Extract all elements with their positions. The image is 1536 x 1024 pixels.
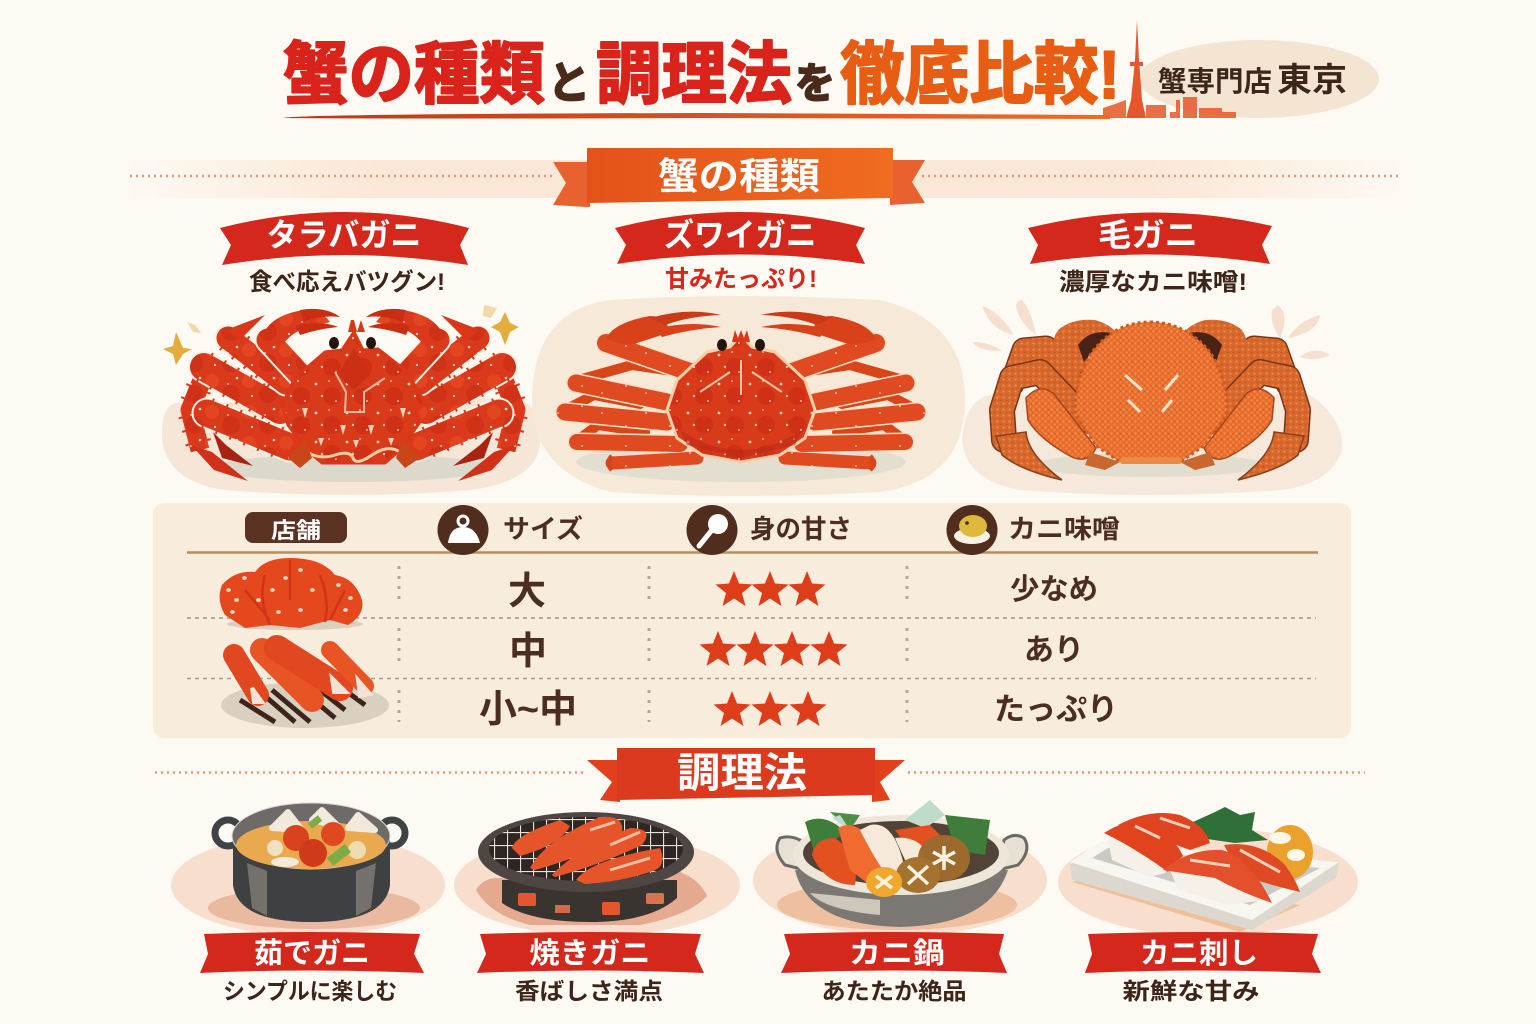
shop name badge: 蟹専門店 xyxy=(1158,66,1272,97)
row 2 values: あり xyxy=(1024,634,1084,667)
icon: miso dish xyxy=(946,505,998,555)
icon: size weight xyxy=(438,505,488,555)
row 3 values: たっぷり xyxy=(994,692,1118,727)
title text: 徹底比較! xyxy=(840,37,1120,113)
ribbon: ズワイガニ: ズワイガニ xyxy=(664,217,816,253)
ribbon: カニ刺し: カニ刺し xyxy=(1140,937,1258,970)
backdrop xyxy=(1058,828,1358,936)
thumbnail: whole crab xyxy=(220,558,363,630)
ribbon: タラバガニ xyxy=(220,212,469,265)
card: crab sashimi xyxy=(1058,807,1358,1004)
rules xyxy=(187,551,1318,554)
ribbon: 茹でガニ: 茹でガニ xyxy=(254,937,370,970)
backdrop xyxy=(171,834,445,936)
ribbon: カニ鍋 xyxy=(781,932,1007,973)
rating: 3 stars xyxy=(716,571,826,606)
title text: を xyxy=(795,60,835,107)
caption: 濃厚なカニ味噌! xyxy=(1059,269,1247,296)
backdrop xyxy=(454,834,740,936)
ribbon: タラバガニ: タラバガニ xyxy=(266,217,422,253)
caption: シンプルに楽しむ xyxy=(223,978,397,1004)
row 3 values xyxy=(479,689,1118,731)
header: store: 店舗 xyxy=(271,518,321,543)
ribbon: 毛ガニ: 毛ガニ xyxy=(1098,217,1198,253)
caption: 新鮮な甘み xyxy=(1122,978,1260,1004)
card: boiled crab xyxy=(171,803,445,1004)
icon: clay hot pot xyxy=(777,800,1027,927)
shop name badge xyxy=(1139,40,1379,118)
comparison table xyxy=(153,503,1351,738)
ribbon: 焼きガニ xyxy=(477,932,704,973)
section heading: cooking methods xyxy=(155,748,1365,802)
icon: sushi plate xyxy=(1070,807,1339,930)
header: crab miso: カニ味噌 xyxy=(1008,514,1120,544)
caption: 食べ応えバツグン! xyxy=(249,268,445,296)
backdrop xyxy=(162,398,540,495)
shadow xyxy=(213,454,493,482)
header: size xyxy=(438,505,583,555)
backdrop xyxy=(532,296,965,496)
header: sweetness xyxy=(686,505,852,555)
panel: snow crab xyxy=(532,212,965,496)
backdrop xyxy=(962,395,1342,495)
caption: 香ばしさ満点 xyxy=(515,978,663,1004)
crab illustration xyxy=(563,312,919,470)
row 1 values xyxy=(508,571,1098,613)
ribbon: カニ刺し xyxy=(1085,932,1321,973)
title underline xyxy=(283,113,1110,119)
shop name badge: 東京 xyxy=(1277,61,1347,98)
panel: king crab xyxy=(162,212,540,495)
row 2 values xyxy=(509,631,1084,673)
title text: 調理法 xyxy=(596,37,792,113)
icon: charcoal grill xyxy=(478,812,694,922)
row 1 values: 少なめ xyxy=(1010,573,1098,606)
shadow xyxy=(576,442,906,482)
icon: Tokyo tower and skyline xyxy=(1103,20,1236,118)
thumbnail: crab legs xyxy=(221,648,389,728)
section heading: crab types: 蟹の種類 xyxy=(658,156,820,197)
section heading: cooking methods: 調理法 xyxy=(677,750,807,796)
shadow xyxy=(1035,453,1265,477)
rating: 3 stars xyxy=(714,691,826,726)
header: size: サイズ xyxy=(503,514,583,544)
section heading: crab types xyxy=(120,148,1410,207)
row 1 values: 大 xyxy=(508,571,546,613)
ribbon: カニ鍋: カニ鍋 xyxy=(849,937,945,970)
rating: 4 stars xyxy=(700,631,848,666)
splash marks xyxy=(972,300,1330,359)
crab illustration xyxy=(996,320,1304,480)
table background xyxy=(153,503,1351,738)
card: crab hot pot xyxy=(753,800,1047,1004)
title text xyxy=(283,37,1120,113)
card: grilled crab xyxy=(454,812,740,1004)
icon: spoon xyxy=(686,505,738,555)
title text: 蟹の種類 xyxy=(283,37,545,113)
sparkles xyxy=(163,332,192,365)
row 3 values: 小~中 xyxy=(479,689,577,731)
panel: hairy crab xyxy=(962,212,1342,495)
ribbon: 毛ガニ xyxy=(1028,212,1272,264)
row 2 values: 中 xyxy=(509,631,547,673)
crab illustration xyxy=(190,309,516,481)
title text: と xyxy=(548,59,590,108)
ribbon: ズワイガニ xyxy=(615,212,865,264)
header: sweetness: 身の甘さ xyxy=(750,514,852,544)
caption: 甘みたっぷり! xyxy=(665,266,817,293)
ribbon: 焼きガニ: 焼きガニ xyxy=(530,937,650,970)
header: store xyxy=(245,512,347,543)
ribbon: 茹でガニ xyxy=(200,932,424,973)
icon: pot xyxy=(215,803,405,922)
title block xyxy=(283,20,1379,119)
caption: あたたか絶品 xyxy=(822,978,966,1004)
header: crab miso xyxy=(946,505,1120,555)
backdrop xyxy=(753,824,1047,936)
